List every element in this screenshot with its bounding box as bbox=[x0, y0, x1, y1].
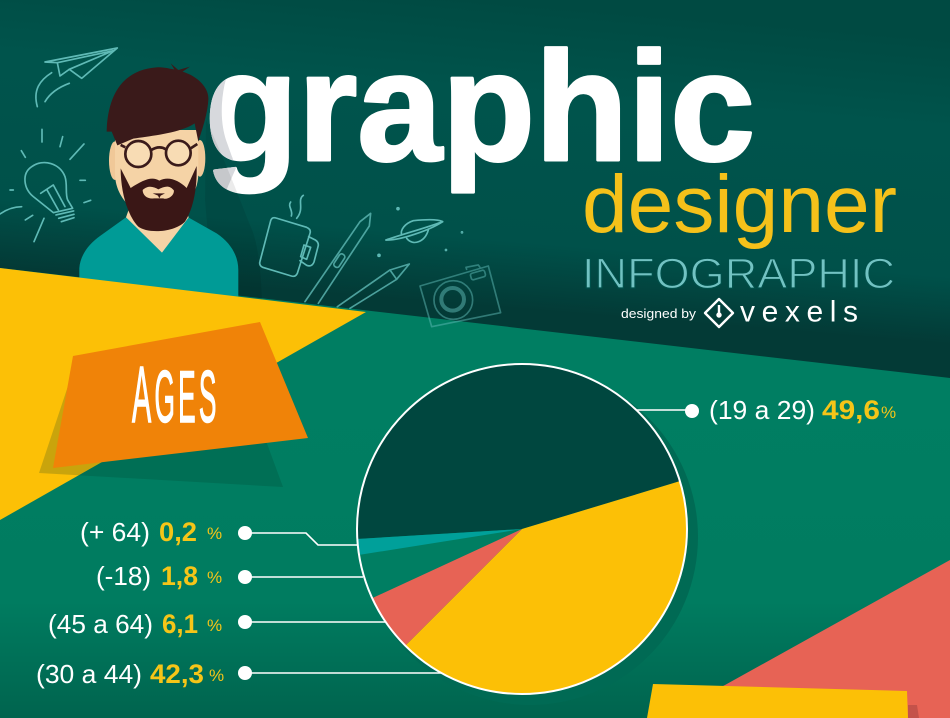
heading: ages: AGES bbox=[132, 350, 220, 439]
label: -18: 1,8 bbox=[161, 561, 198, 591]
background: green field bbox=[0, 250, 950, 718]
subtitle: designer: designer bbox=[582, 159, 897, 250]
label: +64: (+ 64) bbox=[80, 517, 150, 547]
coral corner shape bbox=[660, 560, 950, 718]
slice: +64 bbox=[358, 529, 522, 555]
label: 45 a 64: 6,1 bbox=[162, 609, 198, 639]
label: 19 a 29: 49,6 bbox=[822, 395, 880, 425]
shirt bbox=[79, 217, 238, 313]
title: graphic: graphic bbox=[205, 20, 755, 193]
label: 30 a 44 bbox=[36, 659, 442, 689]
pie chart: ages bbox=[356, 363, 698, 695]
banner shadow bbox=[39, 380, 283, 487]
doodle: planet bbox=[378, 208, 462, 256]
credit: designed by vexels bbox=[621, 296, 858, 328]
label: -18: % bbox=[207, 568, 222, 587]
ears bbox=[109, 141, 121, 180]
slice: 19 a 29 bbox=[358, 365, 679, 539]
doodle: pencil bbox=[337, 264, 409, 308]
doodle: camera bbox=[420, 265, 501, 327]
credit: designed by vexels: vexels bbox=[740, 296, 858, 328]
mouth patch bbox=[143, 187, 174, 199]
banner bbox=[53, 322, 308, 468]
subtitle: INFOGRAPHIC: INFOGRAPHIC bbox=[582, 250, 895, 298]
panel: ages banner bbox=[39, 322, 308, 487]
label: +64: % bbox=[207, 524, 222, 543]
doodle: light bulb bbox=[0, 129, 91, 242]
doodle: coffee mug bbox=[260, 195, 318, 276]
icon: vexels diamond bbox=[705, 299, 733, 327]
label: 45 a 64: % bbox=[207, 616, 222, 635]
doodle: paper plane bbox=[36, 48, 117, 107]
pie shadow bbox=[362, 369, 698, 705]
credit: designed by vexels: designed by bbox=[621, 306, 697, 321]
neck bbox=[126, 197, 189, 253]
label: 19 a 29: % bbox=[881, 403, 896, 422]
label: +64: 0,2 bbox=[159, 517, 197, 547]
slice: 30 a 44 bbox=[406, 481, 686, 693]
pie outline bbox=[357, 364, 687, 694]
label: -18: (-18) bbox=[96, 561, 151, 591]
header band bbox=[0, 0, 950, 378]
label: 30 a 44: % bbox=[209, 666, 224, 685]
glasses bbox=[121, 141, 197, 167]
label: 19 a 29: (19 a 29) bbox=[709, 395, 815, 425]
yellow corner triangle bbox=[0, 268, 366, 520]
label: +64 bbox=[80, 517, 357, 547]
label: 30 a 44: (30 a 44) bbox=[36, 659, 142, 689]
beard bbox=[121, 166, 197, 231]
face bbox=[115, 130, 198, 217]
label: 19 a 29 bbox=[637, 395, 896, 425]
label: 45 a 64 bbox=[48, 609, 386, 639]
pie base: green slice bbox=[357, 364, 687, 694]
doodle: pen bbox=[305, 213, 371, 303]
slice: 45 a 64 bbox=[373, 529, 522, 645]
hair bbox=[107, 63, 208, 145]
bottom yellow panel bbox=[647, 684, 919, 718]
label: 45 a 64: (45 a 64) bbox=[48, 609, 153, 639]
character: hipster designer bbox=[79, 63, 262, 320]
title: graphic: graphic bbox=[205, 20, 755, 193]
character shadow bbox=[205, 120, 262, 320]
pie slices bbox=[358, 365, 686, 693]
label: -18 bbox=[96, 561, 363, 591]
label: 30 a 44: 42,3 bbox=[150, 659, 204, 689]
